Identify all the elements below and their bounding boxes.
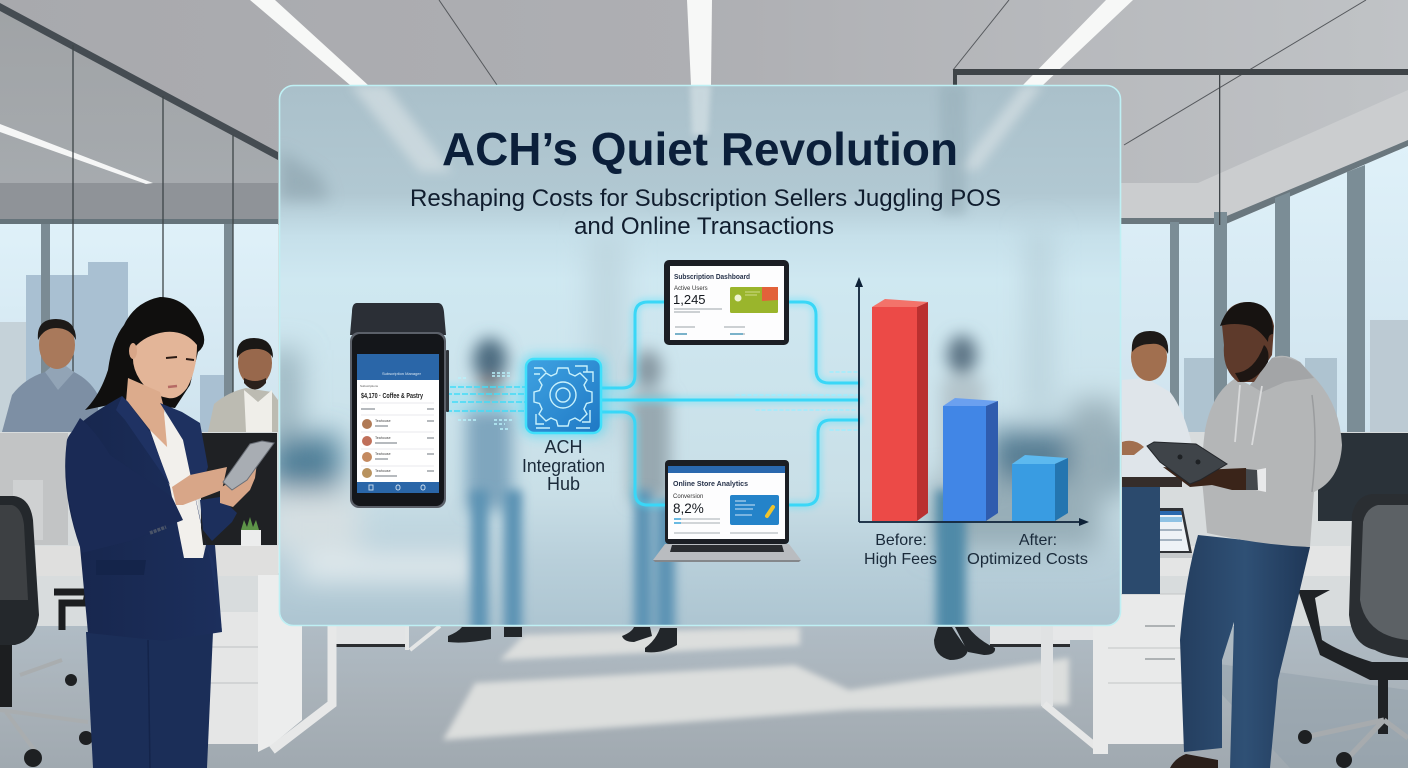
plant xyxy=(241,530,261,553)
hand on phone xyxy=(172,467,227,505)
data stream from POS to hub xyxy=(446,373,525,429)
hands xyxy=(1163,467,1250,490)
hoodie body xyxy=(1202,356,1342,547)
forearm xyxy=(200,497,237,541)
POS terminal: Teahouse xyxy=(375,452,391,456)
jeans xyxy=(1180,535,1310,768)
axes xyxy=(859,284,1082,522)
woman with phone xyxy=(65,297,274,768)
connector lines xyxy=(602,302,858,505)
watch xyxy=(1246,469,1258,490)
blurred people xyxy=(466,335,984,510)
POS terminal: Subscription Manager xyxy=(382,371,422,376)
hair xyxy=(85,297,204,410)
hub label xyxy=(522,437,605,494)
tablet: subscription dashboard: 1,245 xyxy=(673,292,706,307)
head xyxy=(1222,302,1274,382)
floor xyxy=(0,626,1408,768)
left windows xyxy=(0,224,278,432)
cuff xyxy=(1256,468,1266,492)
shoe xyxy=(1170,754,1218,768)
chart label: after: After: xyxy=(1019,532,1057,549)
phone xyxy=(223,441,274,490)
ear xyxy=(129,343,137,359)
office worker: back left man xyxy=(2,319,98,432)
bar chart xyxy=(855,277,1089,526)
blurred ceiling light reflections xyxy=(350,85,452,172)
chart label: after: Optimized Costs xyxy=(967,551,1088,568)
bar: after optimized xyxy=(1012,455,1068,521)
jacket left lapel xyxy=(116,396,170,485)
POS terminal xyxy=(350,303,449,508)
blurred wall shapes xyxy=(279,150,330,200)
hub label: ACH xyxy=(544,437,583,457)
office worker: back right man xyxy=(1122,331,1192,594)
hub label: Integration xyxy=(522,456,605,476)
chart label: after xyxy=(967,532,1088,568)
jacket xyxy=(65,396,222,641)
pants xyxy=(86,632,213,768)
glass panel xyxy=(270,85,1130,636)
printer head xyxy=(350,303,446,335)
face xyxy=(133,332,197,398)
laptop: online store analytics: Online Store Analytics xyxy=(673,479,748,488)
neck and chest xyxy=(126,378,168,448)
laptop: online store analytics: Conversion xyxy=(673,494,703,500)
eyes and lips xyxy=(166,357,194,360)
subtitle xyxy=(410,185,1001,240)
man with tablet xyxy=(1147,302,1342,768)
desks behind the panel xyxy=(332,626,1070,650)
chart label: before: Before: xyxy=(875,532,927,549)
device body xyxy=(350,332,446,508)
blouse xyxy=(150,412,200,560)
circuit traces xyxy=(534,366,593,428)
chart label: before xyxy=(864,532,937,568)
POS terminal: $4,170 · Coffee & Pastry xyxy=(361,391,424,400)
laptop: online store analytics xyxy=(653,460,801,562)
ceiling light strips xyxy=(250,0,1133,85)
jacket right lapel xyxy=(160,403,222,632)
tablet: subscription dashboard xyxy=(664,260,789,345)
hub label: Hub xyxy=(547,474,580,494)
held tablet xyxy=(1147,442,1227,484)
subtitle: and Online Transactions xyxy=(574,213,834,240)
laptop: online store analytics: 8,2% xyxy=(673,501,704,516)
small laptop xyxy=(1124,508,1192,553)
left glass wall xyxy=(0,10,278,222)
subtitle: Reshaping Costs for Subscription Sellers Juggling POS xyxy=(410,185,1001,212)
screen xyxy=(357,354,439,493)
office worker: back middle man xyxy=(208,338,278,432)
visible shoes below panel xyxy=(448,627,995,660)
POS terminal: Teahouse xyxy=(375,469,391,473)
ACH integration hub icon xyxy=(522,355,605,436)
right ceiling structure xyxy=(953,69,1408,75)
blurred legs xyxy=(471,490,966,636)
tablet: subscription dashboard: Active Users xyxy=(674,286,708,292)
bar: before high fees xyxy=(872,299,928,521)
left office chair xyxy=(0,496,93,767)
POS terminal: Teahouse xyxy=(375,419,391,423)
right windows xyxy=(1121,146,1408,432)
POS terminal: Subscriptions xyxy=(360,384,379,388)
bar: mid cost xyxy=(943,398,998,521)
left desk area xyxy=(0,433,332,752)
gear xyxy=(534,368,592,426)
right office chair xyxy=(1298,494,1408,768)
tablet: subscription dashboard: Subscription Dashboard xyxy=(674,272,750,281)
right desk area xyxy=(1041,432,1408,754)
title: ACH’s Quiet Revolution xyxy=(442,123,958,175)
wall band xyxy=(0,432,1408,628)
chart label: before: High Fees xyxy=(864,551,937,568)
POS terminal: Teahouse xyxy=(375,436,391,440)
blurred back desks xyxy=(270,230,1130,579)
sleeve xyxy=(66,418,183,553)
